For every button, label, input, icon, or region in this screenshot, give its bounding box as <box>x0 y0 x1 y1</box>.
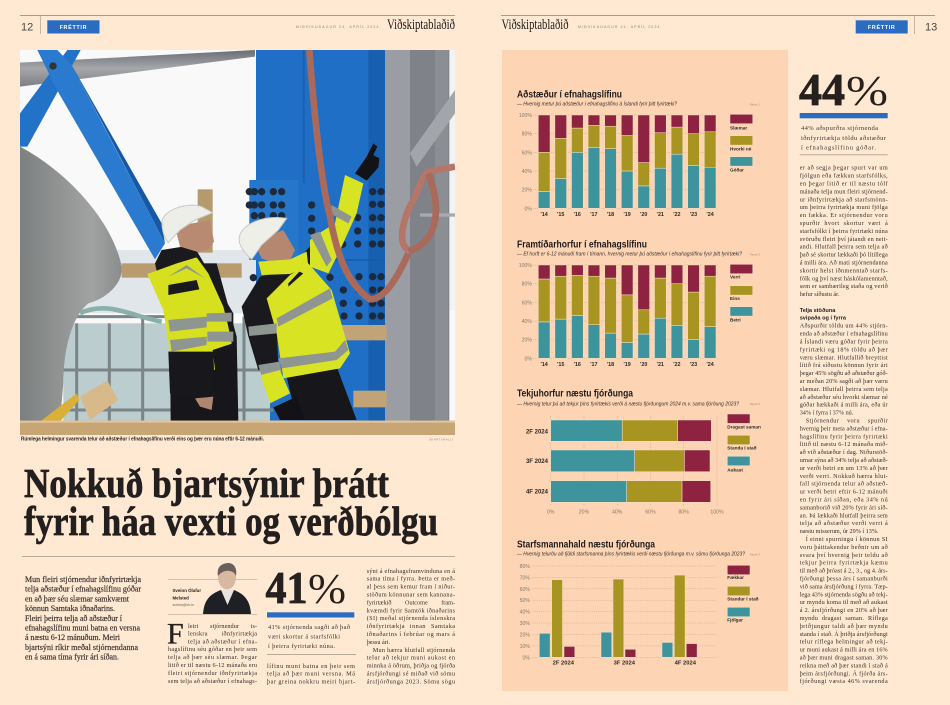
body column 4: mánaða telja mun fleiri stjórnend- <box>800 188 888 195</box>
chart: Starfsmannahald næstu fjórðunga: 3F 2024 <box>614 660 636 666</box>
intro text: bjartsýni ríkir meðal stjórnendanna <box>25 643 138 652</box>
byline text: Melsted <box>172 596 189 600</box>
photo: two workers in hi-vis jackets at steel structure <box>20 50 455 435</box>
chart: Aðstæður í efnahagslífinu: 20% <box>522 188 532 194</box>
intro text: könnun Samtaka iðnaðarins. <box>25 604 115 613</box>
chart title: Aðstæður í efnahagslífinu <box>517 89 622 100</box>
chart: Framtíðarhorfur í efnahagslífinu: '23 <box>690 362 697 368</box>
key figure 41%: % <box>308 567 346 613</box>
chart: Tekjuhorfur næstu fjórðunga: 0% <box>547 510 555 516</box>
body column 3: iðnaðarins í febrúar og mars á <box>367 631 455 638</box>
legend <box>727 414 761 472</box>
key figure caption <box>268 624 350 650</box>
legend: Hvorki né <box>730 146 752 151</box>
body column 4 continued: þriðjungur taldi að þær myndu <box>800 623 888 630</box>
body column 4 continued: fall stjórnenda telur að aðstæð- <box>800 481 888 488</box>
body column 1: fleiri stjórnendur iðnfyrirtækja <box>168 670 257 677</box>
legend: Betri <box>730 318 741 323</box>
body column 4 continued: að við aðstæður í dag. Niðurstöð- <box>800 449 888 456</box>
key figure caption: 44% aðspurðra stjórnenda <box>801 125 878 132</box>
intro text: en að þær séu slæmar samkvæmt <box>25 594 130 603</box>
legend: Verri <box>730 275 740 280</box>
body column 3: iðnfyrirtækja innan Samtaka <box>367 623 455 630</box>
chart title: Starfsmannahald næstu fjórðunga <box>517 539 655 550</box>
section tag <box>47 20 100 34</box>
body column 4 continued: hvernig þeir meta aðstæður í efna- <box>800 425 888 432</box>
chart: Framtíðarhorfur í efnahagslífinu: 60% <box>522 300 532 306</box>
body column 1 <box>167 618 257 685</box>
header: left page <box>20 15 455 34</box>
body column 4: spurðir hvort skortur væri á <box>800 220 888 227</box>
chart: Aðstæður í efnahagslífinu: 80% <box>522 132 532 138</box>
body column 1: hagslífinu séu góðar en þeir sem <box>168 646 257 653</box>
chart question: — Hvernig telur þú að tekjur þíns fyrirtækis verði á næstu fjórðungum 2024 m.v. sama fjórðung 2023? <box>516 401 739 407</box>
intro text: efnahagslífinu muni batna en versna <box>25 624 140 632</box>
chart: Aðstæður í efnahagslífinu: '19 <box>623 212 631 218</box>
chart: Tekjuhorfur næstu fjórðunga: 80% <box>679 510 689 516</box>
body column 1: leiri stjórnendur is- <box>188 623 257 630</box>
byline with portrait <box>168 563 257 615</box>
body column 4: á milli ára. Að mati stjórnendanna <box>800 260 888 266</box>
key figure caption <box>801 125 887 151</box>
chart: Aðstæður í efnahagslífinu: '20 <box>640 212 647 218</box>
body column 4 continued: enda að aðstæður í efnahagslífinu <box>800 331 888 338</box>
key figure 44% <box>799 64 888 118</box>
chart: Framtíðarhorfur í efnahagslífinu: '17 <box>590 362 598 368</box>
body column 1: sem telja að aðstæður í efnahags- <box>168 678 257 685</box>
chart: Starfsmannahald næstu fjórðunga: 40% <box>520 610 530 616</box>
headline: fyrir háa vexti og verðbólgu <box>24 498 438 544</box>
body column 3: þessu ári. <box>367 639 391 646</box>
body column 3: (SI) meðal stjórnenda íslenskra <box>367 615 455 622</box>
body column 4: andi. Hlutfall þeirra sem telja að <box>800 244 888 251</box>
chart: Aðstæður í efnahagslífinu: '17 <box>590 212 598 218</box>
headline <box>24 460 438 544</box>
body column 4 continued: standa í stað. Á þriðja ársfjórðungi <box>800 630 888 638</box>
intro text <box>25 575 141 662</box>
legend: Standur í stað <box>727 595 759 601</box>
body column 4 <box>800 165 889 298</box>
photo credit: SKAPTI/HALLI <box>429 438 453 442</box>
chart: Aðstæður í efnahagslífinu: 60% <box>522 150 532 156</box>
chart: Tekjuhorfur næstu fjórðunga: 4F 2024 <box>526 490 549 496</box>
chart: Tekjuhorfur næstu fjórðunga: 100% <box>710 510 724 516</box>
body column 4 continued: myndu dragast saman. Ríflega <box>800 615 888 622</box>
body column 2: lífinu muni batna en þeir sem <box>267 663 355 670</box>
body column 4 continued: an. Þá lækkaði hlutfall þeirra sem <box>800 512 888 519</box>
date: MIÐVIKUDAGUR 24. APRÍL 2024 <box>296 25 379 29</box>
body column 4 continued: fyrirtæki og 18% töldu að þær <box>800 346 888 353</box>
body column 1: telja að aðstæður í efna- <box>188 638 257 645</box>
section tag right: FRÉTTIR <box>868 23 896 31</box>
body column 4 continued: telur ríflega helmingur að tekj- <box>800 639 888 646</box>
body column 3: kvæmdi fyrir Samtök iðnaðarins <box>367 607 456 614</box>
chart: Framtíðarhorfur í efnahagslífinu: '16 <box>574 362 581 368</box>
header: right page <box>501 15 937 34</box>
body column 3: stöðum könnunar sem kannana- <box>367 592 455 598</box>
body column 3: fyrirtækið Outcome fram- <box>367 599 455 606</box>
chart: Starfsmannahald næstu fjórðunga: 60% <box>520 587 530 593</box>
key figure caption: í þeirra fyrirtæki núna. <box>268 643 335 650</box>
body column 4 continued: ur myndu koma til með að aukast <box>800 599 888 606</box>
page number 13: 13 <box>925 22 937 34</box>
body column 3: ársfjórðungi sé miðað við sömu <box>367 670 455 678</box>
chart title: Framtíðarhorfur í efnahagslífinu <box>517 239 647 250</box>
body column 4 continued: telja að aðstæður verði verri á <box>800 520 888 527</box>
chart: Framtíðarhorfur í efnahagslífinu: '24 <box>706 362 714 368</box>
body column 4 continued: litið til næstu 6-12 mánaða mið- <box>800 441 888 448</box>
logo right: Viðskiptablaðið <box>502 17 568 33</box>
body column 4 continued: hagslífinu fyrir þeirra fyrirtæki <box>800 433 888 440</box>
body column 4 continued: svara því hvernig þeir teldu að <box>800 552 888 559</box>
body column 4 continued: ar meðan 20% sagði að þær væru <box>800 378 888 385</box>
legend: Dragast saman <box>727 425 761 430</box>
body column 3 <box>367 568 456 685</box>
body column 3: sama tíma í fyrra. Þetta er með- <box>367 576 455 583</box>
body column 4: fólk og því næst háskólamenntað, <box>800 275 888 282</box>
body column 4 continued: ur muni aukast á milli ára en 16% <box>800 647 888 654</box>
body column 2: þar greina nokkru meiri bjart- <box>267 678 355 685</box>
body column 4: hefur síðustu ár. <box>800 291 840 298</box>
chart: Starfsmannahald næstu fjórðunga: 70% <box>520 575 530 581</box>
body column 4 continued: reikna með að þær standi í stað á <box>800 662 888 669</box>
chart: Tekjuhorfur næstu fjórðunga: 3F 2024 <box>526 459 549 465</box>
legend: Eins <box>730 296 740 301</box>
body column 4 continued: við sama ársfjórðung í fyrra. Tæp- <box>800 583 888 590</box>
body column 4 continued: fjórðungi væsta 46% svarenda <box>800 678 888 685</box>
intro text: Fleiri þeirra telja að aðstæður í <box>25 614 123 623</box>
key figure 44%: 44 <box>799 64 845 115</box>
body column 4: svöruðu fleiri því játandi en neit- <box>800 236 888 243</box>
chart: Aðstæður í efnahagslífinu: '21 <box>657 212 664 218</box>
logo: Viðskiptablaðið <box>387 17 455 33</box>
body column 4: um þeirra fyrirtækja muni fjölga <box>800 204 888 211</box>
chart: Framtíðarhorfur í efnahagslífinu: 40% <box>522 319 532 325</box>
body column 1: litið er til næstu 6-12 mánaða eru <box>168 662 257 669</box>
body column 4: en þegar litið er til næstu tólf <box>800 180 889 188</box>
body column 4: en fækka. Er stjórnendur voru <box>800 212 888 219</box>
body column 4 continued: væru slæmar. Hlutfallið breyttist <box>800 354 888 361</box>
body column 4 continued: Stjórnendur voru spurðir <box>806 418 888 424</box>
chart: Aðstæður í efnahagslífinu: Mynd 1 <box>750 102 760 106</box>
body column 4 continued: á 2. ársfjórðungi en 20% að þær <box>800 607 888 614</box>
legend <box>730 264 753 323</box>
chart: Aðstæður í efnahagslífinu: '15 <box>557 212 564 218</box>
chart: Starfsmannahald næstu fjórðunga: 50% <box>520 598 530 604</box>
body column 4 continued: til með að þróast á 2., 3., og 4. árs- <box>800 568 888 575</box>
stacked bars <box>538 115 716 208</box>
chart: Starfsmannahald næstu fjórðunga: 2F 2024 <box>553 660 575 666</box>
body column 1: telja að þær séu slæmar. Þegar <box>168 654 257 661</box>
body column 4 continued: á Íslandi væru góðar fyrir þeirra <box>800 338 888 346</box>
body column 4 continued: lítið frá síðustu könnun fyrir ári <box>800 362 888 369</box>
body column 4 continued: verði verri. Nokkuð hærra hlut- <box>800 473 888 480</box>
legend <box>730 114 753 173</box>
panel: charts background <box>502 50 788 691</box>
chart: Framtíðarhorfur í efnahagslífinu: Mynd 2 <box>750 252 760 256</box>
chart: Tekjuhorfur næstu fjórðunga: 20% <box>579 510 590 516</box>
chart: Tekjuhorfur næstu fjórðunga <box>516 388 761 516</box>
key figure caption: iðnfyrirtækja töldu aðstæður <box>801 135 887 142</box>
chart question: — Hvernig telurðu að fjöldi starfsmanna þíns fyrirtækis verði næstu fjórðunga m.v. sömu fjórðunga 2023? <box>516 552 745 558</box>
body column 4: sem er sambærileg staða og verið <box>800 283 888 290</box>
chart: Aðstæður í efnahagslífinu: '16 <box>574 212 581 218</box>
stacked horizontal bars <box>551 420 711 502</box>
body column 4 continued: slæmar. Hlutfall þeirra sem telja <box>800 386 888 393</box>
legend <box>727 565 759 623</box>
key figure caption: væri skortur á starfsfólki <box>268 634 340 640</box>
body column 4 continued: að þær muni dragast saman. 30% <box>800 654 888 662</box>
chart question: — Ef horft er 6-12 mánuði fram í tímann, hvernig metur þú aðstæður í efnahagslífinu fyrir þitt fyrirtæki? <box>516 252 742 258</box>
chart: Framtíðarhorfur í efnahagslífinu: '15 <box>557 362 564 368</box>
chart: Starfsmannahald næstu fjórðunga <box>516 539 760 666</box>
grouped bars <box>539 575 697 657</box>
intro text: telja aðstæður í efnahagslífinu góðar <box>25 585 141 594</box>
chart: Tekjuhorfur næstu fjórðunga: Mynd 3 <box>750 402 760 406</box>
legend: Fjölgar <box>727 618 743 623</box>
legend: Slæmar <box>730 126 747 131</box>
body column 1: lenskra iðnfyrirtækja <box>188 630 257 638</box>
body column 4 continued: næstu misserum, úr 29% í 13%. <box>800 528 879 535</box>
chart question: — Hvernig metur þú aðstæður í efnahagslífinu á Íslandi fyrir þitt fyrirtæki? <box>516 101 677 108</box>
byline text: sveinn@vb.is <box>172 603 194 607</box>
chart title: Tekjuhorfur næstu fjórðunga <box>517 388 633 399</box>
chart: Aðstæður í efnahagslífinu: '18 <box>607 212 614 218</box>
body column 4: er að segja þegar spurt var um <box>800 165 888 172</box>
key figure 44%: % <box>846 69 888 115</box>
chart: Aðstæður í efnahagslífinu: '23 <box>690 212 697 218</box>
chart: Aðstæður í efnahagslífinu: '22 <box>673 212 681 218</box>
body column 4 continued: 34% í fyrra í 37% nú. <box>800 410 854 417</box>
body column 4 continued: ur verði betri eftir 6-12 mánuði <box>800 489 888 496</box>
subheading: Telja stöðuna <box>800 307 836 314</box>
body column 2: telja að þær muni versna. Má <box>267 670 355 678</box>
body column 4: ur iðnfyrirtækja að starfsmönn- <box>800 196 888 203</box>
body column 3: Mun hærra hlutfall stjórnenda <box>373 647 455 654</box>
section tag: FRÉTTIR <box>60 23 87 31</box>
body column 4 continued: tekjur þeirra fyrirtækja kæmu <box>800 560 888 567</box>
chart: Starfsmannahald næstu fjórðunga: 20% <box>520 632 530 638</box>
drop cap: F <box>167 618 184 650</box>
chart: Framtíðarhorfur í efnahagslífinu: '20 <box>640 362 647 368</box>
legend: Standa í stað <box>727 445 757 451</box>
key figure caption: 41% stjórnenda sagði að það <box>268 624 350 631</box>
body column 4 continued: fjórðungi þessa árs í samanburði <box>800 576 888 582</box>
body column 4 continued: þeim ársfjórðungi. Á fjórða árs- <box>800 669 888 677</box>
subheading: svipaða og í fyrra <box>800 315 847 322</box>
chart: Framtíðarhorfur í efnahagslífinu: 80% <box>522 282 532 288</box>
body column 3: sýni á efnahagsframvinduna en á <box>367 568 455 575</box>
page number 12: 12 <box>21 22 33 34</box>
body column 3: minnka á öðrum, þriðja og fjórða <box>367 663 455 670</box>
body column 4: það sé skortur lækkaði þó lítillega <box>800 252 888 259</box>
chart: Framtíðarhorfur í efnahagslífinu: '21 <box>657 362 664 368</box>
headline: Nokkuð bjartsýnir þrátt <box>24 460 389 506</box>
key figure 41% <box>266 562 354 618</box>
body column 4 continued: voru þátttakendur beðnir um að <box>800 544 888 551</box>
body column 4: skortir helst iðnmenntað starfs- <box>800 267 888 274</box>
body column 4 continued: lega 43% stjórnenda sögðu að tekj- <box>800 591 888 598</box>
chart: Framtíðarhorfur í efnahagslífinu: '19 <box>623 362 631 368</box>
chart: Aðstæður í efnahagslífinu: 0% <box>524 206 532 212</box>
body column 4 continued: samanborið við 20% fyrir ári síð- <box>800 504 888 511</box>
body column 3: telur að tekjur muni aukast en <box>367 655 455 662</box>
chart: Tekjuhorfur næstu fjórðunga: 40% <box>612 510 623 516</box>
body column 4: fjölgun eða fækkun starfsfólks, <box>800 173 888 180</box>
stacked bars <box>538 265 716 358</box>
chart: Aðstæður í efnahagslífinu: 40% <box>522 169 532 175</box>
photo caption: Rúmlega helmingur svarenda telur að aðstæður í efnahagslífinu verði eins og þær eru núna eftir 6-12 mánuði. <box>21 436 265 442</box>
legend: Aukast <box>727 467 743 472</box>
key figure 41%: 41 <box>266 562 308 613</box>
chart: Framtíðarhorfur í efnahagslífinu: 100% <box>519 263 532 269</box>
body column 4 continued: að aðstæður séu hvorki slæmar né <box>800 394 888 401</box>
body column 4 continued: en fyrir ári síðan, eða 34% nú <box>800 496 888 504</box>
chart: Aðstæður í efnahagslífinu <box>516 89 760 218</box>
intro text: en á sama tíma fyrir ári síðan. <box>25 653 119 662</box>
intro text: á næstu 6-12 mánuðum. Meiri <box>25 633 121 642</box>
chart: Starfsmannahald næstu fjórðunga: 10% <box>520 644 530 650</box>
body column 4: starfsfólki í þeirra fyrirtæki núna <box>800 228 888 235</box>
chart: Tekjuhorfur næstu fjórðunga: 2F 2024 <box>526 429 549 435</box>
body column 4 continued: góðar hækkaði á milli ára, eða úr <box>800 402 888 409</box>
section tag right <box>856 20 908 34</box>
body column 4 continued: urnar sýna að 34% telja að aðstæð- <box>800 457 888 464</box>
chart: Starfsmannahald næstu fjórðunga: 4F 2024 <box>675 660 697 666</box>
body column 3: ársfjórðunga 2023. Sömu sögu <box>367 678 455 685</box>
chart: Starfsmannahald næstu fjórðunga: Mynd 4 <box>750 552 760 556</box>
chart: Framtíðarhorfur í efnahagslífinu: '18 <box>607 362 614 368</box>
body column 3: al þess sem kemur fram í niður- <box>367 584 455 591</box>
chart: Aðstæður í efnahagslífinu: '24 <box>706 212 714 218</box>
chart: Aðstæður í efnahagslífinu: 100% <box>519 113 532 119</box>
body column 4 continued: Aðspurðir töldu um 44% stjórn- <box>800 323 888 330</box>
chart: Starfsmannahald næstu fjórðunga: 30% <box>520 621 530 627</box>
body column 2 <box>267 663 355 685</box>
chart: Framtíðarhorfur í efnahagslífinu: '14 <box>540 362 548 368</box>
key figure caption: í efnahagslífinu góðar. <box>801 144 876 151</box>
portrait <box>203 563 251 614</box>
body column 4 continued: ur verði betri en um 13% að þær <box>800 465 888 472</box>
legend: Fækkar <box>727 575 744 580</box>
chart: Framtíðarhorfur í efnahagslífinu: '22 <box>673 362 681 368</box>
chart: Framtíðarhorfur í efnahagslífinu: 0% <box>524 356 532 362</box>
chart: Framtíðarhorfur í efnahagslífinu <box>516 239 760 368</box>
date right: MIÐVIKUDAGUR 24. APRÍL 2024 <box>578 25 660 29</box>
body column 4 continued: þegar 45% sögðu að aðstæður góð- <box>800 370 888 377</box>
body column 4 continued <box>800 323 888 685</box>
subheading <box>800 307 847 322</box>
chart: Starfsmannahald næstu fjórðunga: 0% <box>522 655 530 661</box>
chart: Framtíðarhorfur í efnahagslífinu: 20% <box>522 338 532 344</box>
body column 4 continued: Í einni spurningu í könnun SI <box>806 535 888 543</box>
byline text: Sveinn Ólafur <box>172 588 201 593</box>
chart: Starfsmannahald næstu fjórðunga: 80% <box>520 564 530 570</box>
legend: Góðar <box>730 167 744 173</box>
byline text <box>172 588 201 607</box>
intro text: Mun fleiri stjórnendur iðnfyrirtækja <box>25 575 141 584</box>
chart: Aðstæður í efnahagslífinu: '14 <box>540 212 548 218</box>
chart: Tekjuhorfur næstu fjórðunga: 60% <box>645 510 656 516</box>
